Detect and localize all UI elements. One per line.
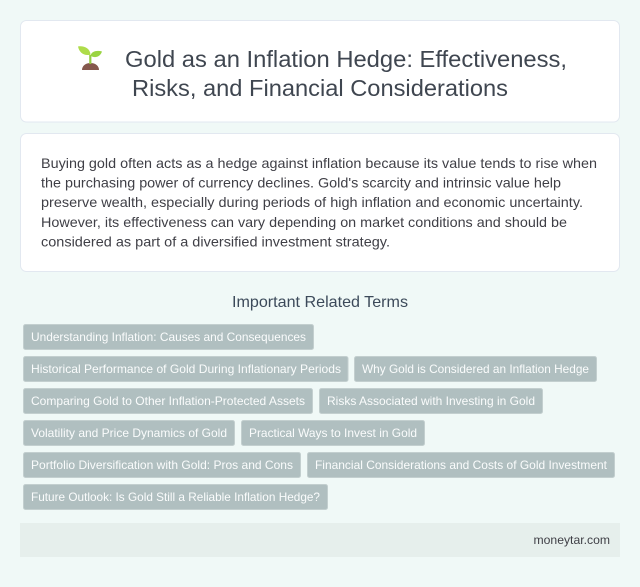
tag: Volatility and Price Dynamics of Gold <box>31 426 227 440</box>
tag: Risks Associated with Investing in Gold <box>327 394 535 408</box>
footer <box>20 523 620 557</box>
tag list <box>24 324 614 510</box>
tag <box>242 420 424 446</box>
tag <box>24 356 348 382</box>
tag: Portfolio Diversification with Gold: Pros and Cons <box>31 458 293 472</box>
tag: Financial Considerations and Costs of Gold Investment <box>315 458 608 472</box>
tag <box>24 452 300 478</box>
panel: description: considered as part of a diversified investment strategy. <box>41 234 390 250</box>
tag: Comparing Gold to Other Inflation-Protected Assets <box>31 394 305 408</box>
tag <box>354 356 596 382</box>
title: Risks, and Financial Considerations <box>132 75 508 101</box>
tag <box>320 388 542 414</box>
tag <box>308 452 614 478</box>
tag: Historical Performance of Gold During Inflationary Periods <box>31 362 341 376</box>
heading: related terms: Important Related Terms <box>232 294 408 311</box>
icon: sprout <box>78 46 102 70</box>
tag <box>24 484 328 510</box>
tag <box>24 420 234 446</box>
title: Gold as an Inflation Hedge: Effectiveness, <box>125 46 567 72</box>
tag: Practical Ways to Invest in Gold <box>249 426 417 440</box>
tag <box>24 388 312 414</box>
panel: description: However, its effectiveness can vary depending on market conditions and should be <box>41 214 567 230</box>
panel: description: preserve wealth, especially during periods of high inflation and economic uncertainty. <box>41 194 583 210</box>
tag: Understanding Inflation: Causes and Consequences <box>31 330 306 344</box>
panel: title card <box>20 20 620 122</box>
tag: Future Outlook: Is Gold Still a Reliable Inflation Hedge? <box>31 490 320 504</box>
title <box>125 46 567 101</box>
tag <box>24 324 314 350</box>
panel: description <box>20 134 620 272</box>
panel: description: the purchasing power of currency declines. Gold's scarcity and intrinsic value help <box>41 174 561 190</box>
footer: moneytar.com <box>534 533 610 547</box>
panel: description: Buying gold often acts as a hedge against inflation because its value tends to rise when <box>41 155 597 171</box>
tag: Why Gold is Considered an Inflation Hedge <box>362 362 589 376</box>
